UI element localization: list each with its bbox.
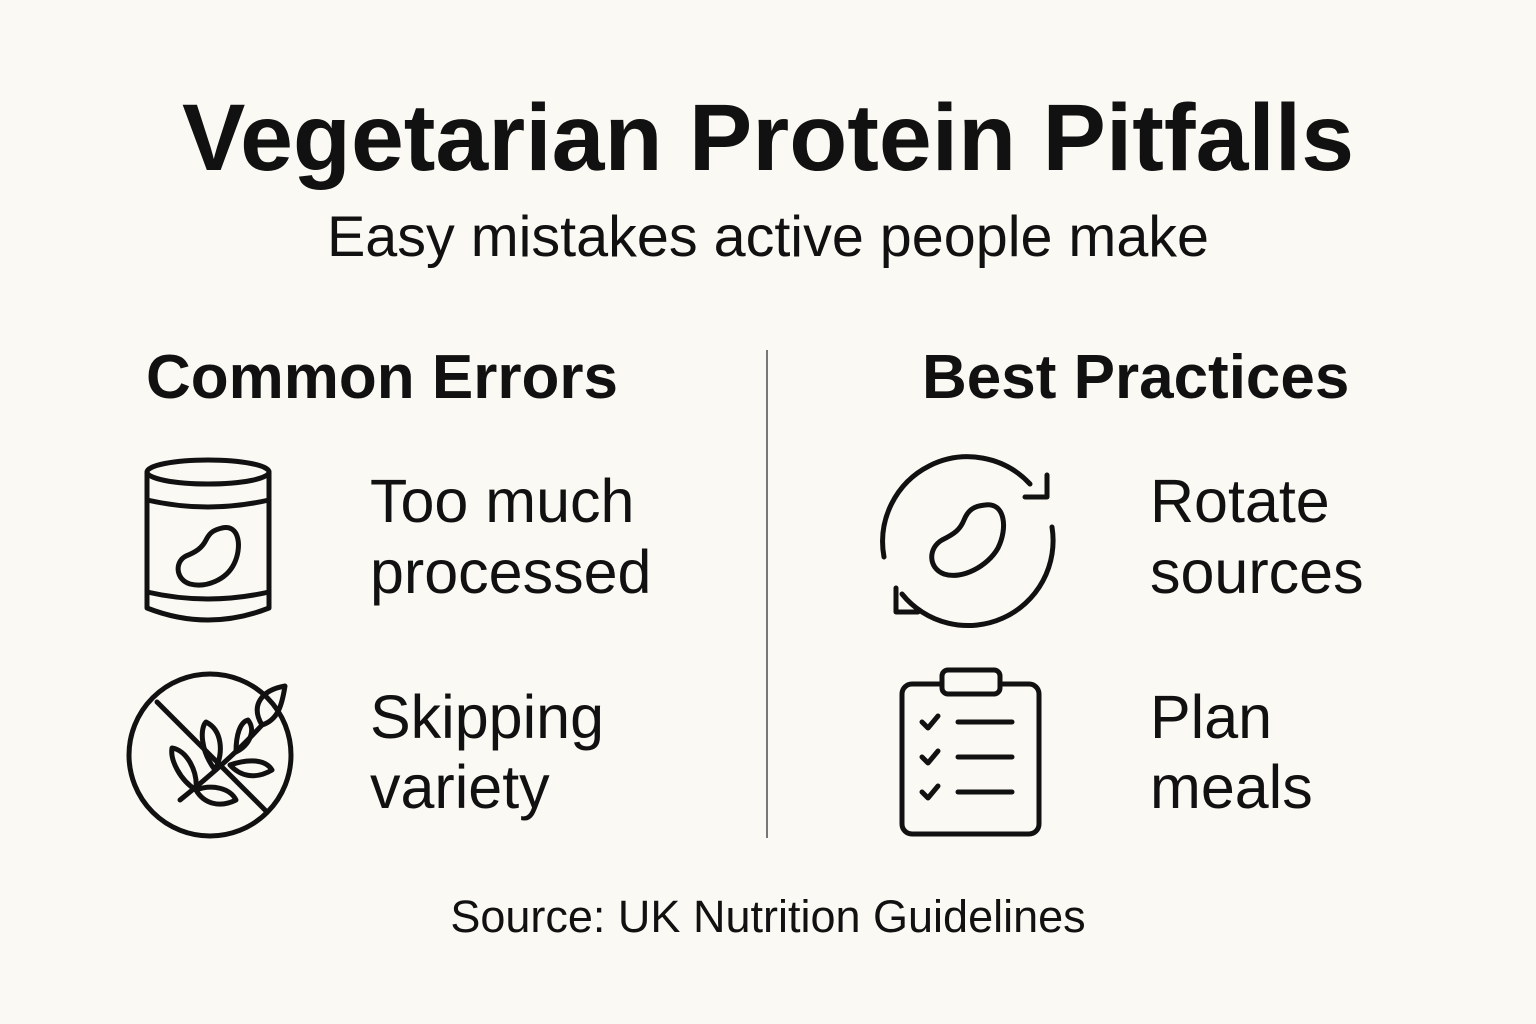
icon: clipboard (902, 670, 1039, 834)
icon: rotate (883, 457, 1053, 626)
subtitle: Easy mistakes active people make (327, 205, 1209, 269)
text: skipping variety: variety (370, 753, 550, 821)
icon: no plant (129, 674, 291, 836)
text: plan meals: meals (1150, 753, 1313, 821)
title: Vegetarian Protein Pitfalls (182, 85, 1354, 191)
icon: can (147, 460, 269, 620)
heading: best practices: Best Practices (922, 343, 1349, 412)
text: skipping variety: Skipping (370, 683, 604, 751)
text: plan meals: Plan (1150, 683, 1272, 751)
text: rotate sources: Rotate (1150, 467, 1330, 535)
text: too much processed: Too much (370, 467, 634, 535)
text: too much processed: processed (370, 538, 651, 606)
text: rotate sources: sources (1150, 538, 1364, 606)
heading: common errors: Common Errors (146, 343, 618, 412)
source: Source: UK Nutrition Guidelines (450, 891, 1086, 942)
